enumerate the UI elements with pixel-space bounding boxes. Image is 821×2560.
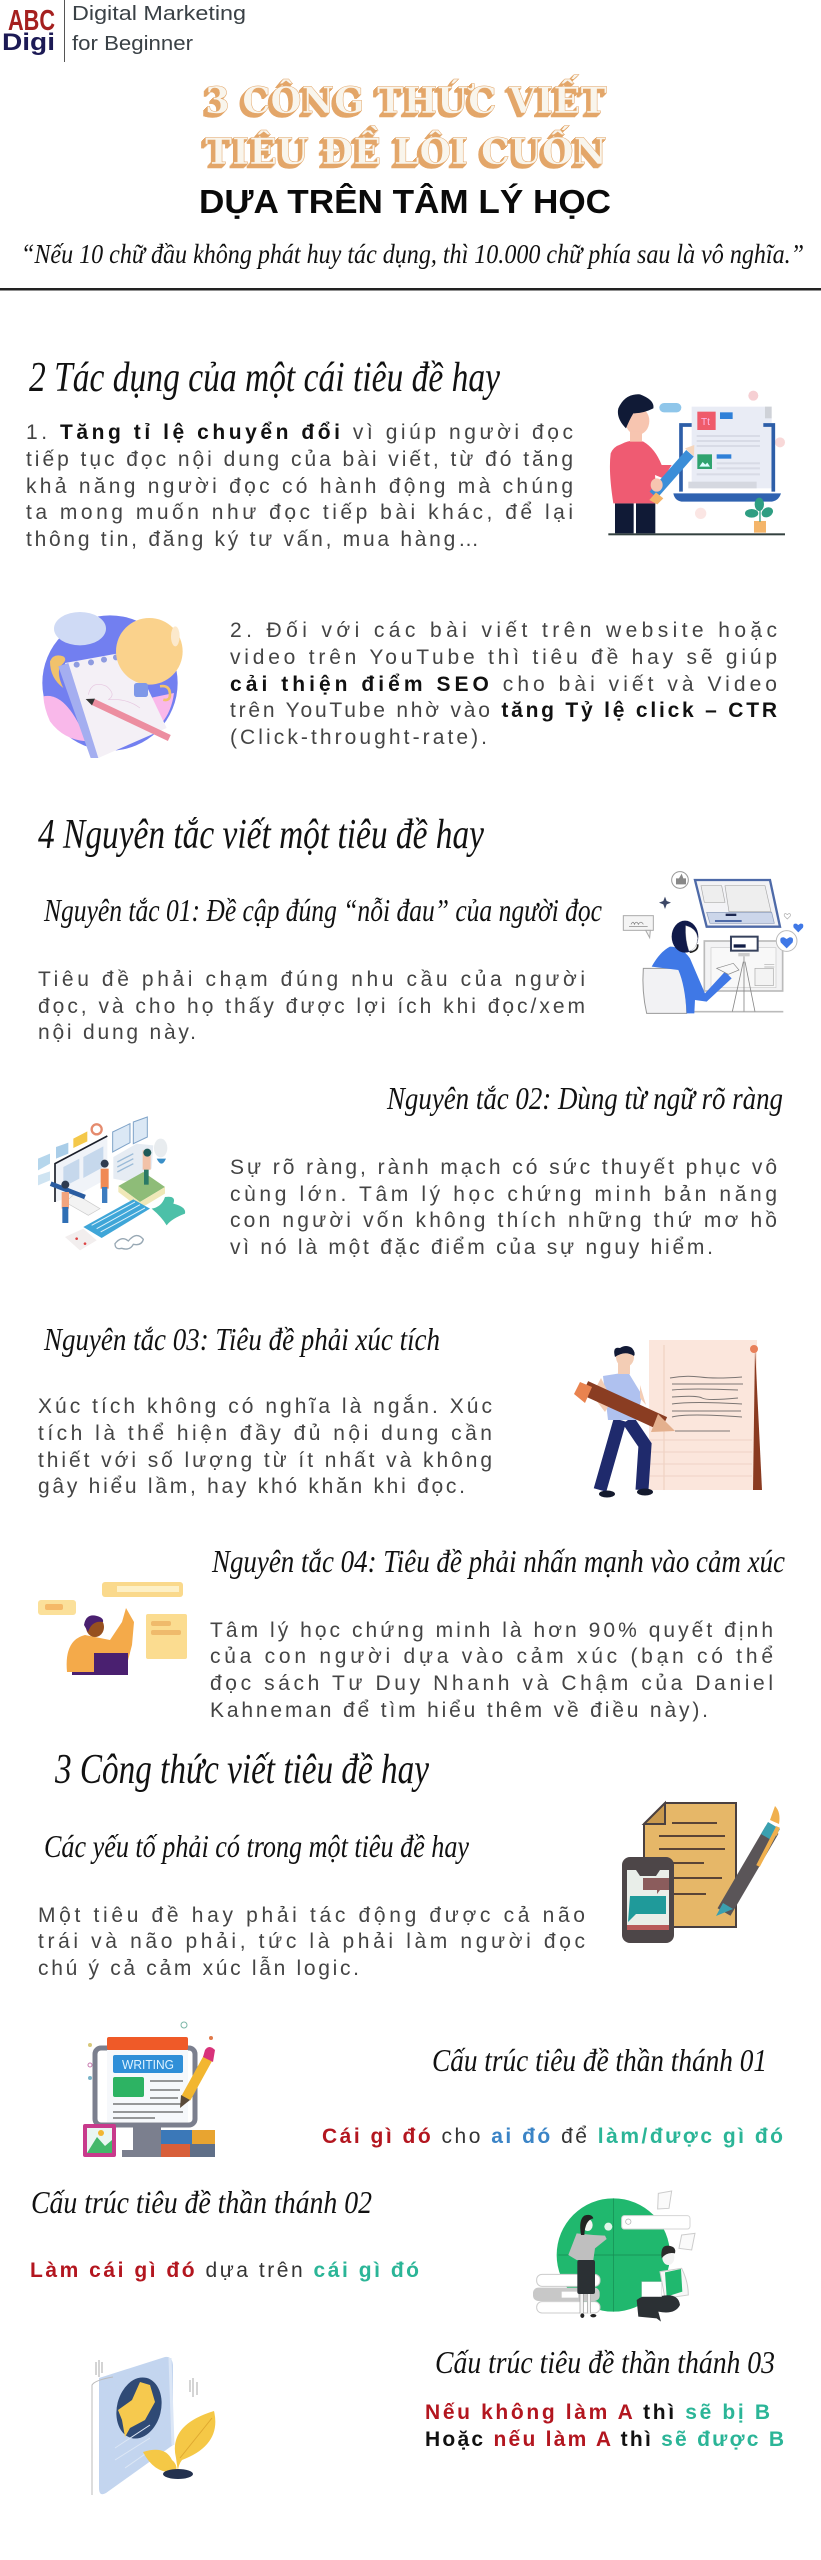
formula 3 [425,2401,784,2451]
logo: ABC Digi, Digital Marketing for Beginner: for Beginner [72,33,193,55]
logo: ABC Digi, Digital Marketing for Beginner: Digi [2,29,55,56]
formula 2: Làm cái gì đó dựa trên cái gì đó [30,2259,419,2282]
icon: writing monitor with pencil: WRITING [122,2057,174,2072]
text block: principle 4 [210,1619,773,1722]
heading: Cấu trúc 03: Cấu trúc tiêu đề thần thánh 03 [435,2344,775,2380]
text block: principle 3 [38,1395,492,1498]
formula 1: Cái gì đó cho ai đó để làm/được gì đó [322,2125,783,2148]
icon: man with pencil and laptop [608,391,785,535]
icon: document, phone and pen [622,1803,780,1943]
text block: benefit 2: video trên YouTube thì tiêu đề hay sẽ giúp [230,646,777,669]
text block: principle 1: nội dung này. [38,1021,196,1044]
title [199,75,611,220]
section heading: 3 Công thức: 3 Công thức viết tiêu đề hay [54,1747,429,1793]
icon: person in hoodie with camera and screens [623,872,803,1013]
heading: Các yếu tố: Các yếu tố phải có trong một tiêu đề hay [44,1828,470,1864]
text block: principle 3: thiết với số lượng từ ít nhất và không [38,1449,492,1472]
text block: benefit 2: 2. Đối với các bài viết trên website hoặc [230,619,777,642]
text block: elements of a title: chú ý cả cảm xúc lẫn logic. [38,1957,359,1980]
icon: man with pencil and laptop: Tt [701,417,710,428]
logo: ABC Digi, Digital Marketing for Beginner: ABC [8,5,55,37]
heading: Nguyên tắc 01: Nguyên tắc 01: Đề cập đúng “nỗi đau” của người đọc [43,892,602,928]
icon: man with giant pencil writing on paper [574,1340,762,1498]
text block: principle 3: gây hiểu lầm, hay khó khăn khi đọc. [38,1475,465,1498]
formula 3: Nếu không làm A thì sẽ bị B [425,2401,770,2424]
text block: principle 2 [230,1156,777,1259]
text block: elements of a title: trái và não phải, tức là phải làm người đọc [38,1930,585,1953]
icon: green globe with two people [533,2191,695,2322]
text block: elements of a title [38,1904,585,1980]
text block: benefit 1 [26,421,573,551]
text block: principle 3: Xúc tích không có nghĩa là ngắn. Xúc [38,1395,492,1418]
text block: principle 2: vì nó là một đặc điểm của sự nguy hiểm. [230,1236,713,1259]
text block: principle 4: của con người dựa vào cảm xúc (bạn có thể [210,1645,773,1668]
text block: benefit 2: trên YouTube nhờ vào tăng Tỷ lệ click – CTR [230,699,777,722]
icon: notebook, light bulb and pencil [42,612,183,758]
formula 3: Hoặc nếu làm A thì sẽ được B [425,2428,784,2451]
icon: isometric workspace [38,1117,185,1250]
logo: ABC Digi, Digital Marketing for Beginner: Digital Marketing [72,3,246,25]
title: DỰA TRÊN TÂM LÝ HỌC [199,183,611,220]
text block: principle 1 [38,968,585,1044]
title: 3 CÔNG THỨC VIẾT [205,75,607,122]
text block: principle 2: cùng lớn. Tâm lý học chứng minh bản năng [230,1183,777,1206]
section heading: 4 Nguyên tắc: 4 Nguyên tắc viết một tiêu đề hay [38,812,484,858]
text block: benefit 1: tiếp tục đọc nội dung của bài viết, từ đó tăng [26,448,573,471]
title: TIÊU ĐỀ LÔI CUỐN [205,126,607,173]
text block: benefit 1: 1. Tăng tỉ lệ chuyển đổi vì giúp người đọc [26,421,573,444]
text block: principle 2: Sự rõ ràng, rành mạch có sức thuyết phục vô [230,1156,777,1179]
text block: principle 4: Kahneman để tìm hiểu thêm về điều này). [210,1699,708,1722]
text block: benefit 2: cải thiện điểm SEO cho bài viết và Video [230,673,777,696]
section heading: 2 Tác dụng: 2 Tác dụng của một cái tiêu đề hay [29,355,500,401]
text block: benefit 1: ta mong muốn như đọc tiếp bài khác, để lại [26,501,573,524]
text block: principle 3: tích là thể hiện đầy đủ nội dung cần [38,1422,492,1445]
heading: Nguyên tắc 03: Nguyên tắc 03: Tiêu đề phải xúc tích [43,1321,440,1357]
heading: Cấu trúc 02: Cấu trúc tiêu đề thần thánh 02 [31,2184,372,2220]
text block: benefit 2: (Click-throught-rate). [230,726,487,749]
icon: globe card with yellow sprout [92,2357,215,2495]
text block: principle 1: đọc, và cho họ thấy được lợi ích khi đọc/xem [38,995,585,1018]
text block: principle 2: con người vốn không thích những thứ mơ hồ [230,1209,777,1232]
icon: writing monitor with pencil [83,2022,215,2157]
text block: benefit 1: khả năng người đọc có hành động mà chúng [26,475,573,498]
text block: principle 1: Tiêu đề phải chạm đúng nhu cầu của người [38,968,585,991]
text block: benefit 2 [230,619,777,749]
logo: ABC Digi, Digital Marketing for Beginner [2,0,246,62]
text block: elements of a title: Một tiêu đề hay phải tác động được cả não [38,1904,585,1927]
text block: principle 4: đọc sách Tư Duy Nhanh và Chậm của Daniel [210,1672,773,1695]
heading: Cấu trúc 01: Cấu trúc tiêu đề thần thánh 01 [432,2042,767,2078]
text block: principle 4: Tâm lý học chứng minh là hơn 90% quyết định [210,1619,773,1642]
text block: benefit 1: thông tin, đăng ký tư vấn, mua hàng… [26,528,479,551]
icon: person pointing at yellow cards [38,1582,187,1675]
